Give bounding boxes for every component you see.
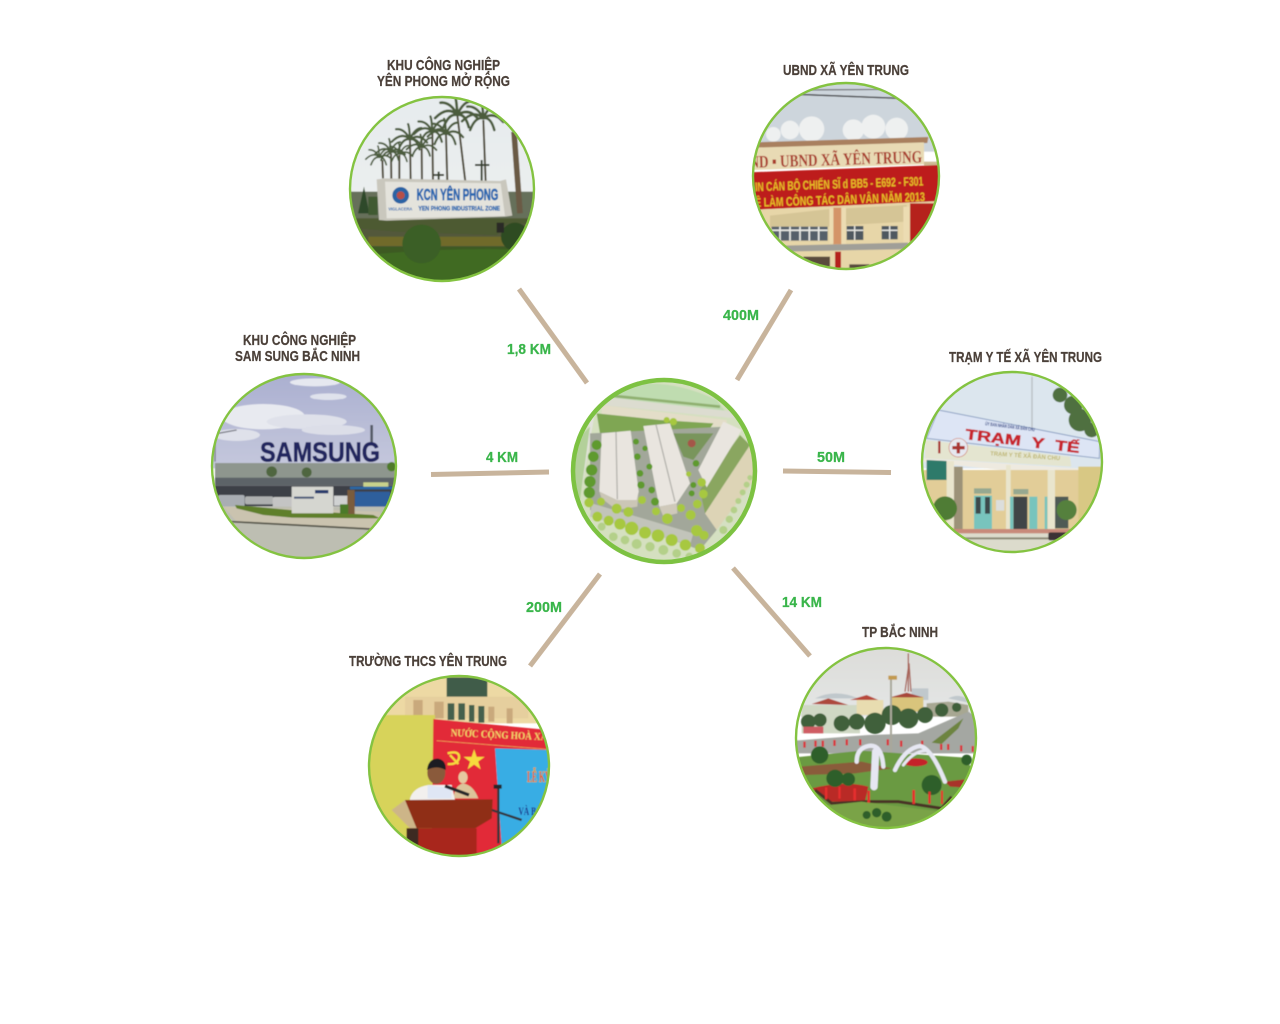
connector: to Trạm y tế [783, 471, 891, 472]
bust [458, 771, 468, 783]
photo circle: Trường THCS Yên Trung [365, 673, 552, 858]
white arches [857, 746, 945, 787]
connector: to KCN Yên Phong [519, 289, 587, 383]
distance label: 50m: 50M [817, 449, 845, 466]
connector: to UBND xã [737, 290, 791, 380]
connector: to Samsung [431, 472, 549, 474]
photo circle: KCN Yên Phong: KCN YÊN PHONG [417, 185, 498, 204]
building blocks [599, 431, 639, 500]
flag emblem: ★ [463, 747, 485, 774]
heading: UBND xã Yên Trung: UBND XÃ YÊN TRUNG [783, 61, 909, 79]
photo circle: project aerial render (centre) [567, 377, 763, 567]
photo circle: Trạm y tế: TRẠM Y TẾ [964, 426, 1081, 457]
photo circle: KCN Yên Phong [348, 96, 536, 282]
photo circle: TP Bắc Ninh [794, 646, 978, 830]
connector: to TP Bắc Ninh [733, 568, 810, 656]
photo circle: Samsung Bắc Ninh: SAMSUNG [260, 436, 380, 467]
heading: Khu công nghiệp Yên Phong mở rộng [377, 56, 510, 90]
photo circle: Trường THCS Yên Trung: VÀ BÁ [518, 804, 542, 818]
distance label: 200m: 200M [526, 599, 562, 616]
distance label: 4 km: 4 KM [486, 449, 518, 466]
connector: to Trường THCS [530, 574, 600, 666]
sign wall [377, 178, 512, 221]
heading: Khu công nghiệp Yên Phong mở rộng: YÊN PHONG MỞ RỘNG [377, 72, 510, 90]
photo circle: UBND xã Yên Trung: IN CÁN BỘ CHIẾN SĨ d BB5 - E692 - F301 [755, 173, 924, 194]
roundabout lawn [799, 750, 970, 812]
rooftop sign [927, 410, 1100, 458]
heading: Trường THCS Yên Trung: TRƯỜNG THCS YÊN TRUNG [349, 652, 507, 670]
photo circle: Trạm y tế [920, 370, 1104, 554]
palm trunks [382, 115, 486, 182]
photo circle: KCN Yên Phong: YEN PHONG INDUSTRIAL ZONE [418, 205, 500, 212]
lectern [405, 799, 493, 828]
street trees [801, 703, 961, 734]
distance label: 1,8 km: 1,8 KM [507, 341, 551, 358]
photo circle: Trường THCS Yên Trung: LỄ KỶ [527, 768, 550, 786]
courtyard and roads [590, 427, 727, 550]
photo circle: Samsung Bắc Ninh [207, 368, 403, 565]
speaker [410, 785, 455, 800]
photo circle: Trạm y tế: ỦY BAN NHÂN DÂN XÃ ĐÀN CHU [985, 420, 1035, 433]
heading: Trạm y tế xã Yên Trung: TRẠM Y TẾ XÃ YÊN TRUNG [949, 348, 1102, 366]
heading: Khu công nghiệp Samsung Bắc Ninh [235, 331, 360, 365]
palm crowns [366, 146, 392, 165]
heading: TP Bắc Ninh: TP BẮC NINH [862, 623, 938, 641]
plots lower right [705, 445, 757, 530]
photo circle: UBND xã Yên Trung: Ệ LÀM CÔNG TÁC DÂN VẬN NĂM 2013 [755, 189, 925, 210]
heading: Khu công nghiệp Samsung Bắc Ninh: KHU CÔNG NGHIỆP [243, 331, 356, 349]
heading: Khu công nghiệp Yên Phong mở rộng: KHU CÔNG NGHIỆP [387, 56, 500, 74]
photo circle: KCN Yên Phong: VIGLACERA [388, 207, 413, 212]
heading: Khu công nghiệp Samsung Bắc Ninh: SAM SUNG BẮC NINH [235, 347, 360, 365]
photo circle: Trường THCS Yên Trung: NƯỚC CỘNG HOÀ XÃ [451, 726, 548, 743]
photo circle: UBND xã Yên Trung [752, 82, 940, 270]
distance label: 400m: 400M [723, 307, 759, 324]
photo circle: Trạm y tế: TRẠM Y TẾ XÃ ĐÀN CHU [990, 450, 1060, 462]
trees [584, 439, 699, 506]
distance label: 14 km: 14 KM [782, 594, 822, 611]
photo circle: UBND xã Yên Trung: ND ▪ UBND XÃ YÊN TRUNG [749, 147, 922, 172]
